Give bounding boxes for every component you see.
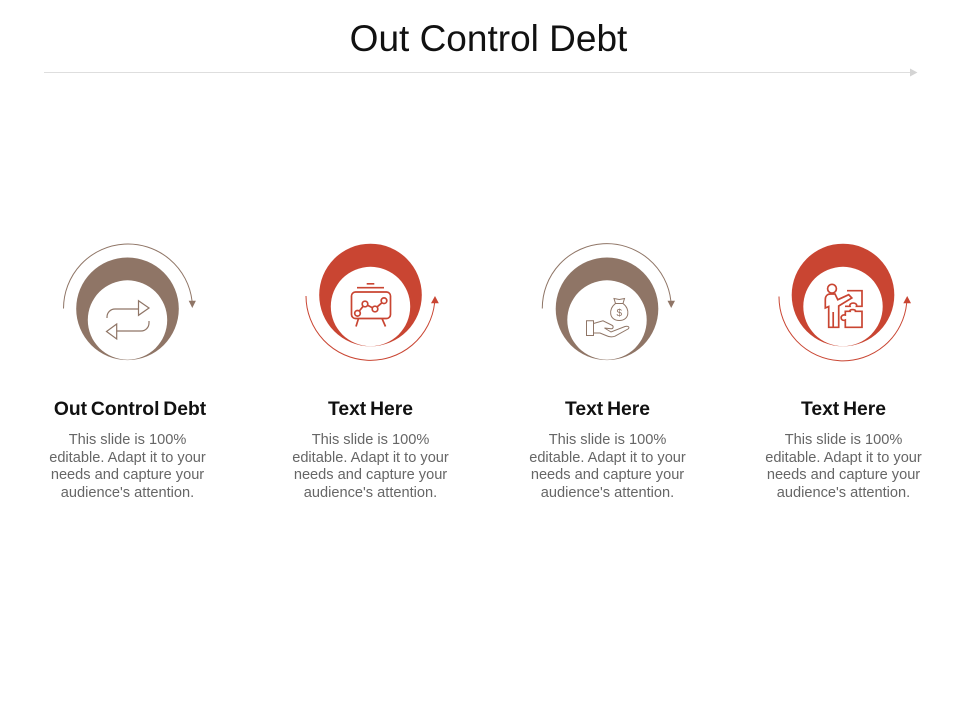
icon: dollar sign: $ bbox=[617, 308, 623, 319]
text block 1: This slide is 100% bbox=[69, 432, 186, 448]
heading 4: Text Here bbox=[801, 399, 886, 420]
text block 3: needs and capture your bbox=[531, 467, 684, 483]
icon: swap arrows bbox=[106, 301, 149, 339]
text block 1: needs and capture your bbox=[51, 467, 204, 483]
text block 3 bbox=[529, 432, 686, 501]
graphic 1 bbox=[64, 244, 196, 360]
text block 1: editable. Adapt it to your bbox=[49, 450, 206, 466]
text block 4 bbox=[765, 432, 922, 501]
text block 2: This slide is 100% bbox=[312, 432, 429, 448]
text block 4: needs and capture your bbox=[767, 467, 920, 483]
graphic 4 bbox=[779, 244, 911, 361]
graphic 2 bbox=[306, 244, 439, 360]
icon: hand with money bag bbox=[586, 298, 629, 337]
icon: person with puzzle bbox=[825, 284, 862, 327]
text block 3: audience's attention. bbox=[541, 485, 674, 501]
icon: chart board bbox=[352, 284, 390, 326]
text block 2 bbox=[292, 432, 449, 501]
heading 1: Out Control Debt bbox=[54, 399, 206, 420]
text block 1 bbox=[49, 432, 206, 501]
heading 3: Text Here bbox=[565, 399, 650, 420]
graphic 3 bbox=[542, 244, 675, 360]
text block 3: This slide is 100% bbox=[549, 432, 666, 448]
title: Out Control Debt bbox=[350, 18, 627, 59]
text block 4: editable. Adapt it to your bbox=[765, 450, 922, 466]
text block 3: editable. Adapt it to your bbox=[529, 450, 686, 466]
text block 1: audience's attention. bbox=[61, 485, 194, 501]
text block 2: audience's attention. bbox=[304, 485, 437, 501]
text block 2: needs and capture your bbox=[294, 467, 447, 483]
text block 2: editable. Adapt it to your bbox=[292, 450, 449, 466]
heading 2: Text Here bbox=[328, 399, 413, 420]
text block 4: This slide is 100% bbox=[785, 432, 902, 448]
text block 4: audience's attention. bbox=[777, 485, 910, 501]
